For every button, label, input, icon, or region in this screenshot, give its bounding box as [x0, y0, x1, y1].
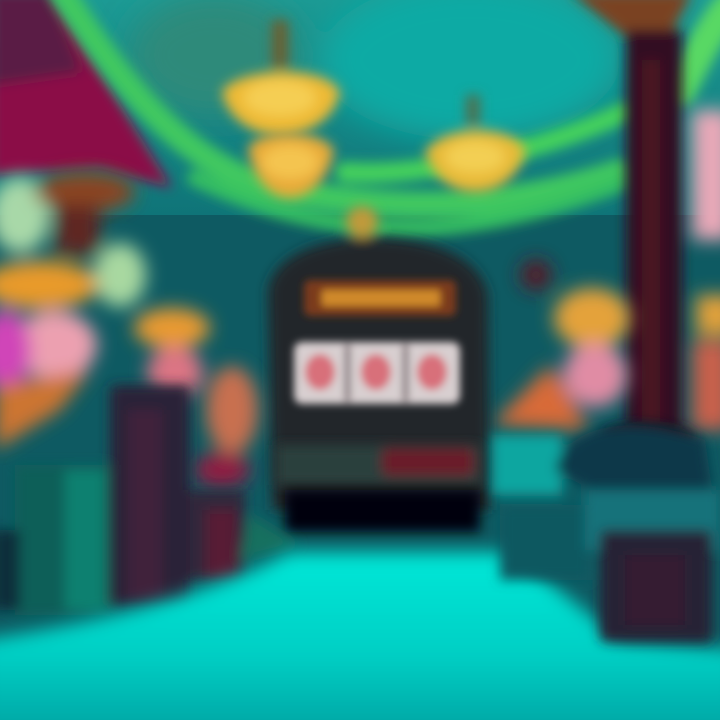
- lamp: right: [425, 95, 526, 192]
- lamp: left upper: [222, 20, 340, 135]
- slot machine: [268, 206, 490, 532]
- left dark columns: [0, 385, 300, 615]
- green ceiling bands: [62, 0, 720, 228]
- floor: [0, 552, 720, 720]
- control deck: [276, 445, 481, 485]
- wooden pillar: [570, 0, 698, 449]
- right seating and cases: [492, 426, 720, 642]
- marquee: [304, 280, 456, 316]
- crimson drape: [0, 0, 172, 188]
- lamp: left lower: [248, 133, 334, 198]
- base: [285, 490, 480, 532]
- right wall pink panel: [692, 110, 720, 430]
- left figures: [0, 172, 258, 488]
- cabinet: [268, 206, 490, 510]
- right figures: [492, 259, 630, 430]
- ceiling glow: [130, 0, 620, 140]
- reel panel: [294, 342, 460, 404]
